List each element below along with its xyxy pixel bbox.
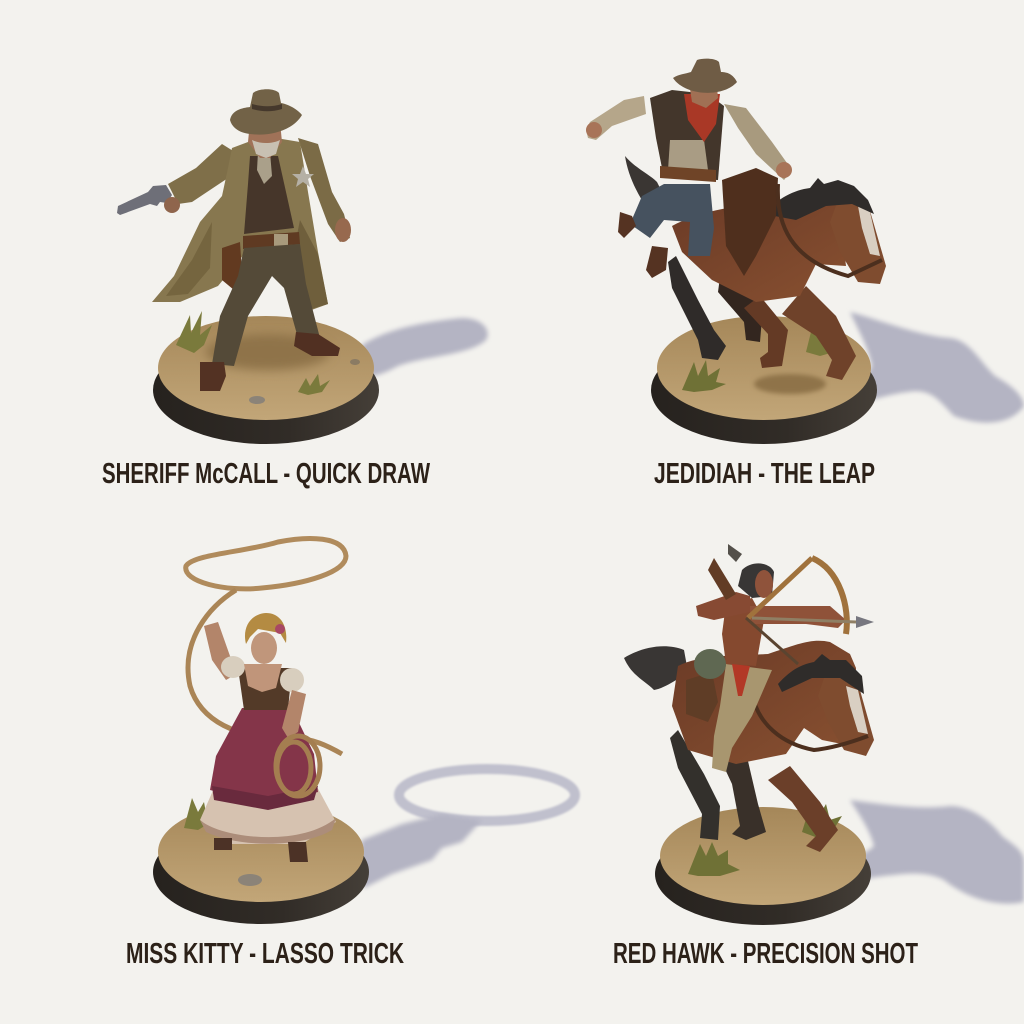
lasso rope [188,590,342,754]
panel: Red Hawk [624,544,1024,925]
figure: sheriff [117,89,351,391]
rope coil [276,736,320,796]
mane [778,654,864,694]
label: Sheriff McCall: SHERIFF McCALL - QUICK DRAW [102,458,430,490]
raised arm [204,622,240,680]
belt [243,232,300,249]
hat [230,89,302,135]
arm left [586,96,646,140]
horse legs [670,730,720,840]
horse tail [624,646,688,690]
panel: Miss Kitty [153,539,575,924]
hair [245,613,286,644]
shadow: kitty [356,769,575,888]
ruffle hem [200,818,336,844]
bridle reins [778,184,882,276]
base: kitty [153,798,369,924]
horse legs [668,256,726,360]
bodice and sleeves [238,668,292,710]
horse body [672,641,856,764]
label: Miss Kitty: MISS KITTY - LASSO TRICK [126,938,404,970]
quiver and arrows [708,558,736,600]
long coat [152,136,328,312]
arm right [724,104,792,180]
head [251,632,277,664]
horse body [672,194,856,302]
boots [618,212,636,238]
panel: Sheriff McCall [117,89,488,444]
chest [244,664,282,692]
head [248,122,282,158]
skirt pink [210,708,318,804]
mane [764,178,874,220]
horse head [818,672,874,756]
horse: red hawk [624,641,874,852]
draw arm [696,592,750,620]
jeans [630,184,714,256]
horse: jedidiah [625,156,886,380]
boots [200,362,226,391]
skirt underlayer [200,770,336,844]
holster [222,242,242,290]
torso [722,598,764,666]
base: sheriff [153,311,379,444]
rider: jedidiah [586,59,792,278]
horse tail [625,156,667,216]
base: jedidiah [651,316,877,444]
raised lasso loop [186,539,346,589]
shadow: sheriff [360,318,488,376]
left arm [298,138,350,242]
base: red hawk [655,804,871,925]
hat [673,59,737,93]
bow [812,558,847,634]
label: Jedidiah: JEDIDIAH - THE LEAP [654,458,875,490]
head and hair [738,563,774,598]
waistcoat [244,156,294,234]
rider: red hawk [694,544,874,772]
head [688,76,718,108]
belt [660,166,716,182]
right arm [282,690,306,738]
bandana [684,94,720,142]
shoes [214,838,232,850]
shadow: jedidiah [838,312,1024,423]
star badge [292,166,314,187]
gun arm [168,144,238,204]
bow arm [750,606,846,628]
revolver [117,185,172,215]
bedroll [694,649,726,679]
arrow [752,618,856,622]
panel: Jedidiah [586,59,1024,444]
saddle [722,168,778,276]
shadow: red hawk [834,800,1024,904]
figure: kitty [186,539,346,862]
trousers [212,244,320,366]
loincloth [732,664,750,696]
legs [712,664,772,772]
saddle and reins [686,672,718,722]
horse head [830,200,886,284]
shirt and vest [650,90,724,180]
